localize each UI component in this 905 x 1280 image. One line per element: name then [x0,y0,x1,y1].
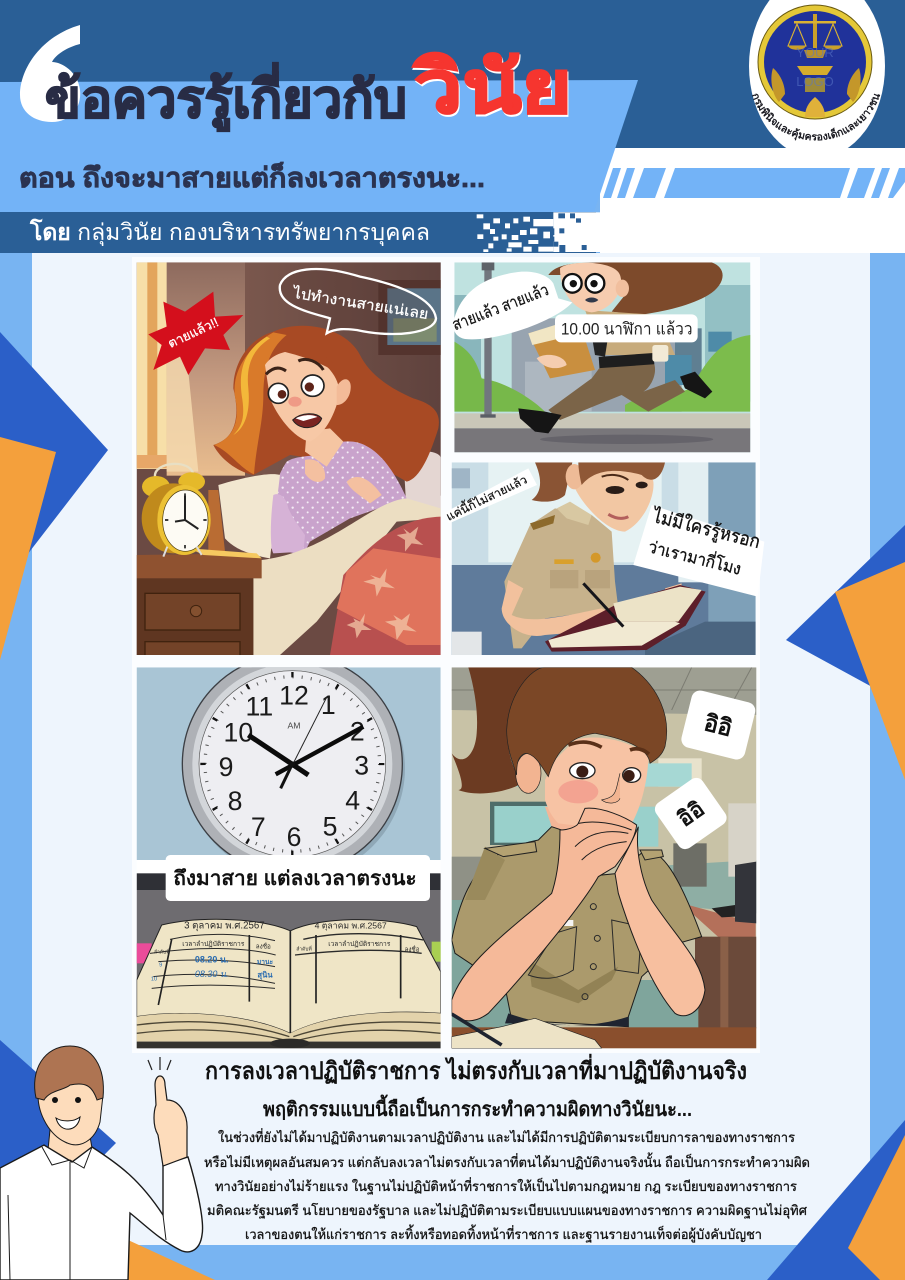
officer [502,462,682,648]
nightstand [137,553,262,662]
curtain [167,262,245,476]
giggle bubble two: อิอิ [673,796,709,832]
speech note left: แค่นี้ก็ไม่สายแล้ว [443,471,529,524]
logbook: ลำดับที่ [296,946,312,953]
logbook: เวลาลำปฏิบัติราชการ [328,940,391,948]
lamp post [480,262,496,418]
title: ข้อควรรู้เกี่ยวกับ [45,63,407,132]
hair [35,1046,103,1100]
right arm [615,827,705,1016]
eyes [52,1097,81,1103]
pointing hand [154,1076,187,1166]
shirt [0,1145,203,1280]
wall clock: 10 [224,717,253,747]
explanation paragraph [204,1128,810,1243]
building [512,318,732,412]
wall clock: 4 [345,785,360,815]
comic backing [132,257,760,1053]
logbook: 9 [159,963,162,969]
desk and notebook [452,1014,756,1048]
speech bubble: ไปทำงานสายแน่เลย [291,284,430,323]
decorative side shapes right [786,525,905,780]
logbook: ลงชื่อ [256,942,271,951]
speech bubble: สายแล้ว สายแล้ว [450,281,551,334]
girl [213,326,439,555]
bushes [454,342,545,412]
logbook: เวลาลำปฏิบัติราชการ [182,940,245,948]
header [0,0,905,253]
logo: LOGO [796,74,834,89]
speech note right: ไม่มีใครรู้หรอก [649,505,762,553]
stripes [603,168,905,198]
wall clock: AM [288,721,300,731]
logbook: สุนิน [257,971,273,981]
logbook: 3 ตุลาคม พ.ศ.2567 [184,921,265,932]
desk background [137,860,441,873]
giggle bubble one [680,689,757,761]
logbook: ลำดับที่ [154,948,169,955]
picture frame [378,280,442,355]
title highlight: วินัย [412,48,572,128]
logbook: 08.20 น. [195,955,228,965]
pavement and road [454,413,750,428]
time caption [555,314,698,342]
main statement: การลงเวลาปฏิบัติราชการ ไม่ตรงกับเวลาที่มาปฏิบัติงานจริง [205,1053,747,1085]
colored tabs [137,943,152,963]
explanation paragraph: ในช่วงที่ยังไม่ได้มาปฏิบัติงานตามเวลาปฏิบัติงาน และไม่ได้มีการปฏิบัติตามระเบียบการลาของทางราชการ [218,1128,795,1145]
back pillow [404,452,440,508]
open logbook [545,583,706,652]
sub statement: พฤติกรรมแบบนี้ถือเป็นการกระทำความผิดทางวินัยนะ... [263,1094,692,1121]
red burst callout [148,292,243,375]
author dark band [0,212,596,253]
running officer [518,262,723,433]
wall clock: 2 [350,717,365,747]
floral blanket [330,517,441,655]
sparkle lines [148,1057,171,1070]
giggle bubble one: อิอิ [702,709,735,741]
logo: กรมพินิจและคุ้มครองเด็กและเยาวชน [752,94,880,141]
author line: โดย กลุ่มวินัย กองบริหารทรัพยากรบุคคล [29,218,430,246]
speech note right: ว่าเรามากี่โมง [646,535,744,579]
caption [166,855,430,901]
quote mark [20,25,80,122]
explanation paragraph: มติคณะรัฐมนตรี นโยบายของรัฐบาล และไม่ปฏิบัติตามระเบียบแบบแผนของทางราชการ ความผิดฐานไม่อุทิศ [207,1202,807,1219]
panel 1: waking up late [137,262,442,662]
explanation paragraph: เวลาของตนให้แก่ราชการ ละทิ้งหรือทอดทิ้งหน้าที่ราชการ และฐานรายงานเท็จต่อผู้บังคับบัญชา [245,1224,762,1243]
right white band [600,148,905,253]
office background [452,667,756,1048]
window [137,262,167,469]
wall clock: 7 [251,812,266,842]
logbook: 08.30 น. [195,969,228,979]
panel 2: running to work [450,262,750,452]
decorative bottom shapes [0,1040,905,1280]
logo [749,0,885,148]
man pointing up [0,1046,203,1280]
panel 3: signing the book [443,462,764,655]
alarm clock [142,464,211,557]
giggling officer [452,667,705,1027]
giggle bubble two [652,775,730,852]
wall clock [182,667,405,855]
caption: ถึงมาสาย แต่ลงเวลาตรงนะ [173,868,417,890]
subtitle: ตอน ถึงจะมาสายแต่ก็ลงเวลาตรงนะ... [19,160,485,193]
main pillow [218,474,280,558]
decorative side shapes left [0,332,108,660]
wall clock: 5 [323,811,337,841]
wall clock: 8 [228,786,242,816]
light blue title banner [0,80,638,212]
neck [48,1125,92,1162]
desk and monitor [688,862,756,1028]
wall clock: 3 [354,751,369,781]
explanation paragraph: หรือไม่มีเหตุผลอันสมควร แต่กลับลงเวลาไม่ตรงกับเวลาที่ตนได้มาปฏิบัติงานจริงนั้น ถือเป็นการกระทำความผิด [204,1152,810,1171]
logbook: มานะ [257,959,274,966]
wall clock: 11 [245,692,273,722]
logbook [137,919,441,1048]
wall clock: 12 [279,681,309,711]
lower wall [452,900,518,1033]
wall [137,667,441,860]
street background [454,262,750,452]
cream blanket [253,498,441,655]
left arm and clasped hands [452,808,637,1021]
header dark band [0,0,905,148]
panel 4: clock and logbook [137,654,442,1048]
time caption: 10.00 นาฬิกา แล้วว [561,319,692,338]
logbook: 10 [151,977,157,983]
sunlight on table [196,549,262,558]
logo: YOUR [796,45,834,60]
bedroom wall [137,262,441,655]
speech note right [633,505,764,597]
speech bubble [280,269,436,334]
face [38,1076,103,1145]
office background [452,462,678,632]
wall clock: 9 [219,752,233,782]
logbook: 4 ตุลาคม พ.ศ.2567 [315,921,387,932]
logbook: ลงชื่อ [404,944,420,953]
explanation paragraph: ทางวินัยอย่างไม่ร้ายแรง ในฐานไม่ปฏิบัติหน้าที่ราชการให้เป็นไปตามกฎหมาย กฎ ระเบียบของทางราชการ [215,1177,797,1195]
content panel [32,253,870,1245]
wall clock: 6 [287,822,301,852]
pixel pattern [477,212,600,252]
wall clock: 1 [321,690,336,720]
panel 5: officer giggling [452,667,757,1048]
shirt details [8,1147,166,1280]
headboard [208,490,225,552]
red burst callout: ตายแล้ว!! [165,314,221,351]
smile [56,1117,80,1129]
